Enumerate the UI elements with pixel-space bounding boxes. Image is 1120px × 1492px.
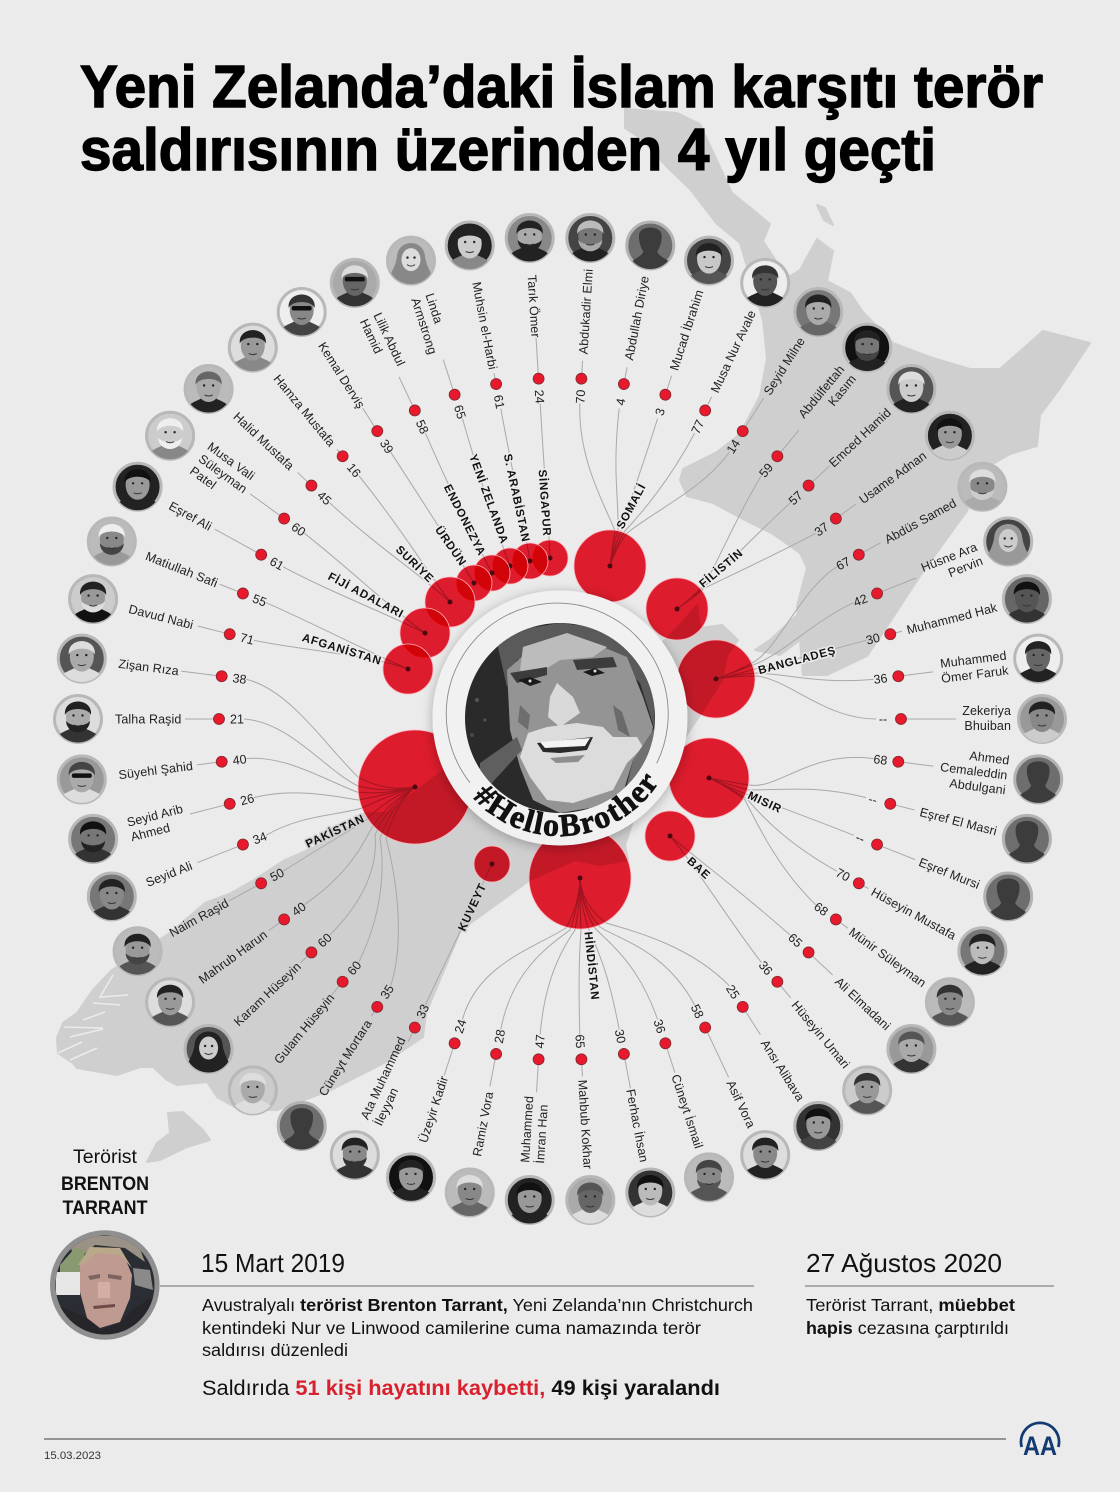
person: Hüseyin Umari: Hüseyin Umari (789, 998, 852, 1071)
person: Abdullah Diriye: Abdullah Diriye (622, 275, 652, 361)
person: Eşref Ali: 61 (267, 554, 286, 573)
person: Muhammed Ömer Faruk: 36 (873, 671, 888, 687)
person: Ramiz Vora: Ramiz Vora (470, 1090, 496, 1158)
person: Eşref Ali: Eşref Ali (166, 499, 214, 534)
person: Üzeyir Kadir: 24 (452, 1018, 469, 1035)
person: Hüseyin Umari (756, 958, 892, 1116)
person: Matiullah Safi: 55 (250, 591, 269, 610)
bubble: BAE (645, 811, 712, 882)
person: Seyid Milne: 14 (724, 437, 743, 456)
bubble: Singapur: SİNGAPUR (536, 469, 553, 537)
person: Seyid Arib Ahmed: Ahmed (129, 821, 172, 844)
person: Tarık Ömer (505, 214, 555, 404)
bubble: BAE: BAE (684, 855, 712, 882)
person: Hamza Mustafa (228, 324, 364, 480)
person: Mahrub Harun (145, 899, 309, 1028)
person: Emced Hamid: 57 (786, 488, 806, 508)
person: Eşref Mursi: -- (854, 830, 867, 846)
person: Ali Elmadani: 65 (785, 931, 805, 950)
person: Musa Vali Süleyman Patel: Musa Vali (205, 440, 257, 483)
person: Eşref El Masri (867, 792, 1051, 865)
person: Eşref Ali (113, 463, 286, 573)
person: Zişan Rıza: Zişan Rıza (118, 657, 180, 678)
person: Kemal Derviş: 39 (377, 437, 396, 456)
bubble: Somali: SOMALİ (614, 481, 649, 531)
person: Zekeriya Bhuiban: -- (879, 712, 887, 726)
terrorist portrait (53, 1233, 157, 1337)
person: Hüsne Ara Pervin: Hüsne Ara (919, 540, 979, 575)
bubble: Kuveyt: KUVEYT (457, 882, 489, 933)
person: Naim Raşid: Naim Raşid (167, 896, 231, 940)
bubble: Hindistan: HİNDİSTAN (581, 931, 602, 1001)
person: Münir Süleyman (811, 900, 975, 1028)
person: Musa Nur Avale: Musa Nur Avale (708, 308, 759, 395)
central medallion: #HelloBrother: #HelloBrother (473, 773, 657, 837)
bubble: Filistin (646, 546, 746, 640)
person: Davud Nabi: 71 (239, 631, 256, 648)
person: Muhammed İmran Han: İmran Han (533, 1104, 551, 1164)
person: Cüneyt Mortara (278, 982, 397, 1152)
person: Seyid Ali: Seyid Ali (144, 859, 194, 890)
person: Seyid Milne: Seyid Milne (761, 335, 808, 398)
terrorist name: TARRANT (62, 1197, 148, 1219)
person: Muhsin el-Harbi: Muhsin el-Harbi (469, 281, 500, 371)
person: Emced Hamid (786, 366, 936, 508)
person: Eşref El Masri: Eşref El Masri (918, 805, 998, 838)
person: Seyid Ali: 34 (251, 829, 269, 847)
person: Talha Raşid: Talha Raşid (115, 712, 181, 726)
event: 15 Mart 2019: 15 Mart 2019 (201, 1248, 345, 1278)
person: Usame Adnan (812, 412, 975, 539)
person: Ata Muhammed İleyyan: İleyyan (371, 1086, 401, 1128)
person: Davud Nabi: Davud Nabi (127, 602, 195, 632)
person: Üzeyir Kadir (386, 1018, 469, 1203)
title: Yeni Zelanda’daki İslam karşıtı terör (80, 54, 1043, 120)
bubble: Pakistan: PAKİSTAN (304, 812, 367, 851)
person: Halid Mustafa (184, 366, 334, 508)
person: Gulam Hüseyin: Gulam Hüseyin (271, 991, 337, 1067)
person: Muhammed Hak (865, 576, 1052, 648)
person: Cüneyt İsmail: 36 (651, 1018, 668, 1035)
person: Ansı Alibava: Ansı Alibava (758, 1037, 807, 1104)
person: Musa Vali Süleyman Patel (145, 412, 317, 551)
person: Asif Vora (688, 1002, 790, 1181)
event: 15 Mart 2019: Avustralyalı terörist Brenton Tarrant, Yeni Zelanda’nın Christchurch (202, 1295, 753, 1315)
person: Zekeriya Bhuiban: Zekeriya (962, 704, 1011, 718)
bubble: Singapur (532, 469, 568, 576)
person: Abdülfettah Kasım (751, 324, 892, 485)
person: Karam Hüseyin (184, 931, 335, 1075)
person: Lilik Abdul Hamid: Hamid (357, 317, 385, 356)
person: Ansı Alibava: 25 (723, 982, 742, 1002)
person: Hüseyin Mustafa: 70 (833, 866, 852, 885)
person: Cüneyt Mortara: 35 (378, 982, 397, 1002)
person: Muhammed Hak: Muhammed Hak (905, 600, 999, 637)
person: Abdullah Diriye (613, 222, 674, 407)
person: Ansı Alibava (723, 982, 843, 1152)
person: Mahrub Harun: 40 (289, 899, 309, 919)
person: Asif Vora: Asif Vora (724, 1078, 758, 1130)
person: Talha Raşid (53, 696, 244, 745)
person: Gulam Hüseyin: 60 (345, 958, 364, 978)
bubble: Fiji Adaları: FİJİ ADALARI (326, 570, 406, 621)
terrorist name: Terörist (73, 1146, 138, 1168)
person: Muhammed Ömer Faruk: Ömer Faruk (940, 663, 1010, 686)
person: Muhammed İmran Han: Muhammed (518, 1096, 536, 1163)
event: 15 Mart 2019: Saldırıda 51 kişi hayatını kaybetti, 49 kişi yaralandı (202, 1377, 720, 1400)
person: Hüseyin Umari: 36 (756, 958, 775, 978)
bubble: Ürdün: ÜRDÜN (432, 524, 469, 569)
person: Zekeriya Bhuiban: Bhuiban (964, 719, 1011, 733)
person: Halid Mustafa: Halid Mustafa (230, 410, 297, 473)
person: Usame Adnan: Usame Adnan (857, 449, 929, 507)
person: Hüsne Ara Pervin: Pervin (946, 554, 985, 580)
person: Ahmed Cemaleddin Abdulgani (871, 737, 1062, 805)
bubble: Ürdün (432, 524, 492, 601)
person: Musa Nur Avale (689, 259, 790, 436)
person: Münir Süleyman: 68 (811, 900, 831, 919)
bubble: Hindistan (529, 827, 631, 1001)
person: Musa Vali Süleyman Patel: Süleyman (196, 452, 250, 496)
person: Talha Raşid: 21 (230, 712, 244, 726)
person: Abdüs Samed: Abdüs Samed (882, 496, 959, 547)
person: Ahmed Cemaleddin Abdulgani: Ahmed (969, 749, 1010, 768)
person: Abdukadir Elmi: 70 (573, 389, 588, 404)
person: Muhammed Hak: 30 (865, 631, 881, 648)
event: 15 Mart 2019 (160, 1248, 754, 1400)
title (80, 54, 1043, 183)
person: Cüneyt İsmail (651, 1018, 734, 1203)
person: Lilik Abdul Hamid: 58 (413, 418, 431, 436)
person: Ata Muhammed İleyyan: Ata Muhammed (358, 1035, 409, 1122)
person: Matiullah Safi: Matiullah Safi (143, 549, 220, 590)
person: Zişan Rıza (57, 635, 247, 687)
person: Süyehl Şahid (57, 752, 247, 805)
person: Eşref El Masri: -- (867, 792, 879, 808)
bubble: Endonezya: ENDONEZYA (441, 483, 487, 558)
icon: AA logo: AA (1023, 1431, 1057, 1461)
central medallion: #HelloBrother (426, 586, 694, 853)
person: Süyehl Şahid: 40 (232, 752, 247, 768)
bubble: Fiji Adaları (326, 570, 450, 658)
event: 27 Ağustos 2020: Terörist Tarrant, müebbet (806, 1295, 1015, 1315)
person: Hüsne Ara Pervin: 42 (851, 591, 870, 610)
person: Gulam Hüseyin (228, 958, 364, 1116)
bubble: Afganistan: AFGANİSTAN (300, 631, 383, 668)
person: Davud Nabi (68, 576, 256, 648)
person: Ata Muhammed İleyyan (330, 999, 439, 1181)
person: Ahmed Cemaleddin Abdulgani: Cemaleddin (939, 760, 1008, 782)
bubble: Mısır: MISIR (746, 790, 783, 816)
person: Ata Muhammed İleyyan: 33 (414, 1002, 432, 1021)
title: saldırısının üzerinden 4 yıl geçti (80, 117, 936, 183)
terrorist name: BRENTON (61, 1173, 149, 1195)
person: Ramiz Vora (445, 1028, 508, 1218)
bubble: Yeni Zelanda (466, 453, 528, 584)
person: Musa Nur Avale: 77 (689, 418, 707, 436)
bubble: Suriye (393, 543, 475, 627)
person: Asif Vora: 58 (688, 1002, 706, 1021)
bubble: Somali (574, 481, 649, 602)
person: Naim Raşid (113, 866, 287, 977)
event: 27 Ağustos 2020 (805, 1248, 1054, 1338)
person: Abdüs Samed (834, 463, 1007, 573)
person: Lilik Abdul Hamid (330, 259, 438, 439)
person: Hüsne Ara Pervin (849, 518, 1033, 617)
person: Karam Hüseyin: 60 (315, 931, 335, 950)
person: Hüseyin Mustafa: Hüseyin Mustafa (869, 885, 958, 943)
person: Usame Adnan: 37 (812, 520, 831, 539)
person: Ahmed Cemaleddin Abdulgani: 68 (873, 752, 888, 768)
person: Muhammed Ömer Faruk (872, 635, 1063, 694)
person: Abdukadir Elmi: Abdukadir Elmi (576, 268, 596, 355)
bubble: Mısır (669, 738, 783, 818)
person: Muhammed İmran Han: 47 (533, 1034, 548, 1049)
person: Cüneyt Mortara: Cüneyt Mortara (316, 1017, 375, 1099)
person: Süyehl Şahid: Süyehl Şahid (118, 759, 194, 782)
person: Kemal Derviş (277, 288, 396, 456)
person: Seyid Milne (724, 288, 843, 456)
person: Mucad İbrahim: 3 (653, 406, 668, 417)
person: Emced Hamid: Emced Hamid (826, 406, 894, 470)
person: Üzeyir Kadir: Üzeyir Kadir (416, 1074, 451, 1145)
person: Ali Elmadani: Ali Elmadani (832, 975, 893, 1033)
terrorist name (61, 1146, 149, 1219)
person: Münir Süleyman: Münir Süleyman (846, 925, 929, 990)
person: Naim Raşid: 50 (268, 866, 287, 885)
bubble: Suriye: SURİYE (393, 543, 436, 586)
person: Ahmed Cemaleddin Abdulgani: Abdulgani (949, 776, 1006, 797)
person: Abdülfettah Kasım: Abdülfettah (796, 363, 847, 421)
footer: 15.03.2023 (44, 1450, 101, 1462)
person: Abdülfettah Kasım: 59 (756, 461, 776, 480)
person: Seyid Ali (87, 829, 269, 922)
person: Halid Mustafa: 45 (314, 488, 334, 508)
map: New Zealand (57, 109, 1090, 1162)
person: Hamza Mustafa: Hamza Mustafa (271, 372, 338, 449)
connector lines (244, 404, 876, 1034)
person: Abdülfettah Kasım: Kasım (825, 372, 859, 409)
bubble: Bangladeş: BANGLADEŞ (757, 645, 837, 677)
person: Musa Vali Süleyman Patel: 60 (289, 520, 308, 539)
person: Kemal Derviş: Kemal Derviş (315, 340, 368, 411)
person: Eşref Mursi (854, 830, 1032, 922)
person: Muhsin el-Harbi (445, 222, 507, 410)
person: Mahrub Harun: Mahrub Harun (196, 928, 270, 987)
bubble: Kuveyt (457, 846, 510, 933)
person: Ali Elmadani (785, 931, 936, 1075)
person: Ferhac İhsan (612, 1028, 675, 1218)
event: 27 Ağustos 2020: hapis cezasına çarptırıldı (806, 1318, 1009, 1338)
person: Ferhac İhsan: Ferhac İhsan (623, 1088, 651, 1163)
event: 15 Mart 2019: kentindeki Nur ve Linwood camilerine cuma namazında terör (202, 1318, 701, 1338)
person: Mucad İbrahim: Mucad İbrahim (667, 288, 706, 372)
person: Linda Armstrong: 65 (451, 403, 469, 421)
person: Linda Armstrong: Armstrong (408, 296, 440, 356)
person: Hüseyin Mustafa (833, 866, 1007, 977)
person: Tarık Ömer: Tarık Ömer (525, 274, 542, 338)
person: Cüneyt İsmail: Cüneyt İsmail (668, 1073, 706, 1150)
person: Zekeriya Bhuiban (879, 696, 1067, 745)
person: Mahbub Kokhar: Mahbub Kokhar (575, 1079, 595, 1170)
person: Mahbub Kokhar (565, 1034, 615, 1226)
person: Abdukadir Elmi (565, 214, 615, 404)
person: Ferhac İhsan: 30 (612, 1028, 628, 1045)
person: Muhammed İmran Han (505, 1033, 555, 1226)
bubble: Yeni Zelanda: YENİ ZELANDA (466, 453, 511, 546)
person: Seyid Arib Ahmed: Seyid Arib (125, 802, 184, 830)
person: Zişan Rıza: 38 (232, 671, 247, 687)
person: Eşref Mursi: Eşref Mursi (917, 855, 982, 892)
person: Seyid Arib Ahmed (68, 784, 258, 865)
event: 15 Mart 2019: saldırısı düzenledi (202, 1340, 348, 1360)
person: Lilik Abdul Hamid: Lilik Abdul (371, 310, 408, 368)
person: Mucad İbrahim (653, 237, 734, 417)
person: Muhammed Ömer Faruk: Muhammed (939, 649, 1007, 671)
person: Matiullah Safi (87, 518, 269, 610)
person: Seyid Arib Ahmed: 26 (239, 791, 256, 808)
bubble: Filistin: FİLİSTİN (697, 546, 746, 590)
person: Tarık Ömer: 24 (532, 389, 547, 404)
person: Abdullah Diriye: 4 (613, 397, 629, 407)
event: 27 Ağustos 2020: 27 Ağustos 2020 (806, 1248, 1002, 1278)
person: Mahbub Kokhar: 65 (572, 1034, 587, 1049)
person: Linda Armstrong: Linda (422, 291, 445, 325)
bubble: S. Arabistan (501, 453, 548, 579)
bubble: Pakistan (304, 730, 472, 851)
bubble: S. Arabistan: S. ARABİSTAN (501, 453, 532, 544)
bubble: Endonezya (441, 483, 510, 591)
person: Musa Vali Süleyman Patel: Patel (187, 464, 219, 492)
person: Muhsin el-Harbi: 61 (491, 394, 507, 410)
person: Karam Hüseyin: Karam Hüseyin (231, 960, 304, 1029)
person: Abdüs Samed: 67 (834, 554, 853, 573)
person: Linda Armstrong (386, 237, 476, 423)
bubble: Bangladeş (677, 640, 837, 718)
person: Hamza Mustafa: 16 (344, 461, 364, 480)
bubble: Afganistan (300, 631, 433, 694)
person: Ramiz Vora: 28 (492, 1028, 508, 1045)
